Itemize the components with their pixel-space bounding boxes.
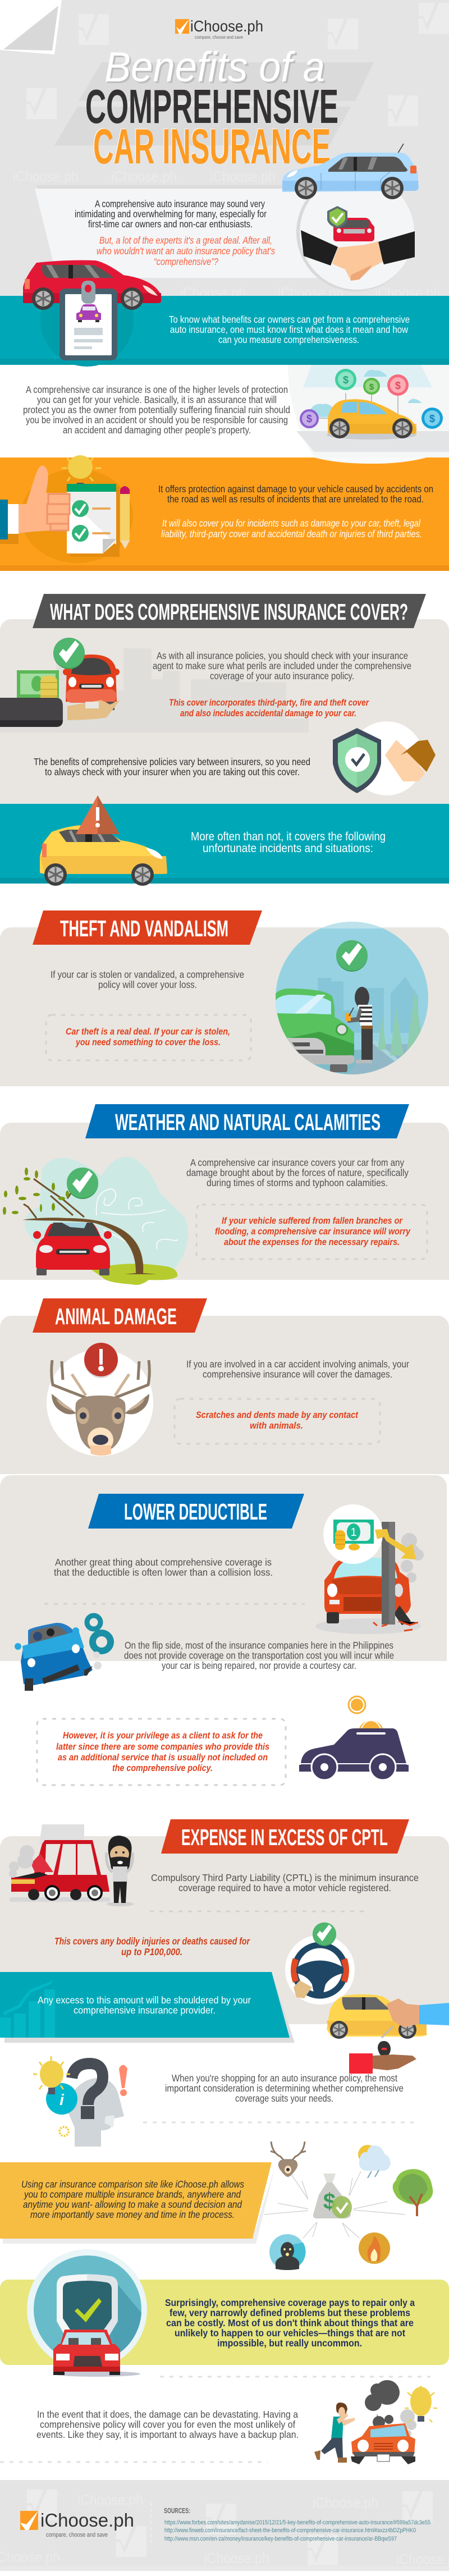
comparison text: anytime you want- allowing to make a sound decision and: [23, 2199, 242, 2210]
panel: header: iChoose.ph: [111, 168, 177, 185]
intro text: [75, 198, 267, 230]
text: coverage required to have a motor vehicle registered.: [178, 1882, 391, 1893]
panel: what does comprehensive insurance cover: [0, 594, 449, 804]
icon: tree falling on red car: [3, 1157, 188, 1285]
text: benefits vary: to always check with your insurer when you are taking out this cover.: [45, 766, 300, 777]
callout: courtesy car privilege: latter since there are some companies who provide this: [56, 1741, 269, 1752]
icon: steering wheel: [285, 1923, 355, 2005]
text: check with agent: [153, 650, 411, 681]
intro text: first-time car owners and non-car enthusiasts.: [88, 218, 253, 230]
panel: comparison site callout: [0, 2162, 275, 2244]
sources: http://www.msn.com/en-za/money/insurance/key-benefits-of-comprehensive-car-insurance/ar-BBqwS97: [164, 2536, 397, 2542]
callout: with animals.: [250, 1420, 303, 1431]
intro text: intimidating and overwhelming for many, especially for: [75, 208, 267, 219]
callout: [46, 1015, 251, 1060]
comparison text: Using car insurance comparison site like iChoose.ph allows: [21, 2179, 244, 2190]
text: shopping for a policy: [165, 2072, 404, 2104]
icon: money bag with risks: [264, 2142, 433, 2270]
callout: about the expenses for the necessary repairs.: [224, 1237, 400, 1247]
panel: header: iChoose.ph: [375, 284, 441, 301]
text: comprehensive insurance will cover the damages.: [203, 1369, 392, 1380]
red callout: up to P100,000.: [121, 1946, 182, 1957]
title: [85, 43, 338, 174]
teal intro text: auto insurance, one must know first what does it mean and how: [170, 324, 408, 335]
text: benefits vary: The benefits of comprehensive policies vary between insurers, so you need: [34, 756, 310, 767]
icon: car key handover: [327, 1994, 449, 2074]
text: [51, 969, 244, 990]
orange band italic text: [161, 518, 422, 539]
icon: money car circle: $: [306, 413, 312, 424]
callout: [196, 1205, 427, 1259]
icon: car crashed into pole: 1: [350, 1526, 357, 1539]
text: [151, 1872, 419, 1893]
panel: footer: iChoose.ph: [204, 2550, 269, 2566]
text: devastating damage: [36, 2409, 299, 2440]
text: Compulsory Third Party Liability (CPTL) is the minimum insurance: [151, 1872, 419, 1883]
callout: courtesy car privilege: the comprehensive policy.: [112, 1763, 213, 1773]
text: can be costly. Most of us don't think about things that are: [166, 2317, 414, 2328]
panel: header: iChoose.ph: [180, 284, 246, 301]
teal excess text: comprehensive insurance provider.: [74, 2005, 216, 2016]
icon: coin car: [299, 1696, 409, 1780]
panel: footer: [0, 2480, 449, 2571]
text: [165, 2297, 415, 2349]
panel: footer: iChoose.ph: [77, 2491, 143, 2508]
comparison text: more importantly save money and time in the process.: [30, 2209, 235, 2220]
callout: Scratches and dents made by any contact: [196, 1410, 359, 1420]
panel: theft and vandalism: [0, 910, 449, 1086]
heading banner: [33, 910, 262, 945]
red callout: [54, 1936, 250, 1957]
text: Another great thing about comprehensive coverage is: [55, 1557, 272, 1568]
callout: flooding, a comprehensive car insurance will worry: [215, 1226, 411, 1237]
icon: car crashed into pole: [315, 1504, 424, 1634]
panel: teal covers band: [0, 795, 449, 886]
heading banner: [161, 1819, 409, 1854]
text: check with agent: agent to make sure what perils are included under the comprehensive: [153, 660, 411, 671]
teal intro text: To know what benefits car owners can get from a comprehensive: [169, 314, 410, 325]
red callout: This covers any bodily injuries or deaths caused for: [54, 1936, 250, 1947]
icon: page curl: [0, 0, 62, 54]
text: policy will cover your loss.: [98, 979, 197, 990]
title: Benefits of a: [104, 43, 325, 90]
definition text: A comprehensive car insurance is one of the higher levels of protection: [26, 384, 288, 395]
comparison text: you to compare multiple insurance brands, anywhere and: [24, 2189, 241, 2200]
icon: car in hand with money: [0, 638, 120, 727]
panel: surprisingly: [0, 2249, 449, 2377]
teal intro text: can you measure comprehensiveness.: [218, 334, 359, 345]
callout: [175, 1399, 380, 1444]
intro red callout: who wouldn't want an auto insurance policy that's: [97, 245, 275, 257]
callout: courtesy car privilege: [37, 1719, 286, 1785]
text: shopping for a policy: When you're shopping for an auto insurance policy, the most: [172, 2072, 397, 2084]
panel: header: [0, 0, 449, 301]
panel: orange band: [0, 365, 449, 571]
intro red callout: But, a lot of the experts it's a great deal. After all,: [99, 235, 272, 246]
red callout: [169, 697, 369, 719]
sources: SOURCES:: [164, 2506, 190, 2515]
text: [186, 1358, 409, 1380]
panel: expense in excess of CPTL: [0, 1819, 449, 2024]
title backing shapes: [54, 62, 374, 145]
text: damage brought about by the forces of nature, specifically: [186, 1167, 409, 1178]
text: [54, 1557, 273, 1578]
heading banner: THEFT AND VANDALISM: [60, 916, 228, 941]
text: [186, 1157, 409, 1188]
icon: yellow car with warning triangle: [40, 795, 167, 886]
text: that the deductible is often lower than a collision loss.: [54, 1567, 273, 1578]
sources: [164, 2506, 430, 2542]
panel: teal intro band: [0, 260, 449, 367]
definition text: an accident and damaging other people's property.: [63, 424, 251, 436]
logo: [175, 17, 263, 40]
text: impossible, but really uncommon.: [217, 2337, 362, 2349]
text: On the flip side, most of the insurance companies here in the Philippines: [125, 1640, 393, 1651]
icon: clipboard: [59, 281, 117, 360]
icon: thief at green car: [276, 922, 429, 1075]
icon: check badge: [336, 940, 368, 972]
comparison text: [21, 2179, 244, 2220]
icon: money car circle: $: [395, 380, 401, 391]
text: benefits vary: [34, 756, 310, 777]
panel: lower deductible: [0, 1475, 447, 1691]
panel: intro text card: [35, 185, 359, 278]
red callout: and also includes accidental damage to your car.: [180, 708, 356, 719]
callout: courtesy car privilege: as an additional service that is usually not included on: [58, 1752, 268, 1763]
text: shopping for a policy: coverage suits your needs.: [235, 2093, 333, 2104]
panel: animal damage: [0, 1298, 449, 1474]
teal covers text: [191, 830, 386, 855]
definition text: [23, 384, 290, 436]
text: check with agent: coverage of your auto insurance policy.: [210, 670, 354, 681]
heading banner: [88, 1494, 304, 1529]
panel: weather and natural calamities: [0, 1104, 449, 1285]
text: your car is being repaired, nor provide a courtesy car.: [162, 1660, 356, 1671]
panel: footer: iChoose.ph: [313, 2494, 378, 2511]
heading banner: [33, 1298, 207, 1333]
definition text: you can get for your vehicle. Basically, it is an assurance that will: [37, 394, 277, 405]
teal covers text: More often than not, it covers the following: [191, 830, 386, 843]
heading banner: LOWER DEDUCTIBLE: [124, 1499, 267, 1525]
callout: Car theft is a real deal. If your car is stolen,: [66, 1026, 230, 1037]
teal covers text: unfortunate incidents and situations:: [203, 842, 373, 855]
panel: header: iChoose.ph: [13, 168, 79, 185]
teal intro text: [169, 314, 410, 345]
icon: man and burning car with bulb: [314, 2380, 437, 2464]
icon: thumbs up checklist: [0, 455, 133, 563]
text: devastating damage: events. Like they say, it is important to always have a backup plan.: [36, 2429, 299, 2440]
icon: money bag with risks: $: [323, 2189, 336, 2214]
heading banner: [85, 1104, 409, 1138]
icon: stranded blue car with gears: [15, 1616, 111, 1691]
intro text: A comprehensive auto insurance may sound very: [95, 198, 265, 209]
icon: question head with bulb: i: [59, 2091, 65, 2108]
text: few, very narrowly defined problems but these problems: [169, 2307, 410, 2318]
footer logo: compare, choose and save: [46, 2532, 108, 2538]
icon: shield and red car: [27, 2249, 147, 2377]
icon: handshake over car circle: [296, 173, 415, 291]
text: during times of storms and typhoon calamities.: [207, 1177, 388, 1188]
icon: money car circle: $: [429, 413, 435, 424]
panel: header: iChoose.ph: [210, 168, 276, 185]
teal excess text: Any excess to this amount will be shouldered by your: [38, 1994, 251, 2006]
icon: money car circle: [288, 365, 449, 464]
heading banner: [33, 594, 426, 628]
intro red callout: “comprehensive”?: [154, 256, 218, 267]
icon: deer with alert: [47, 1343, 153, 1456]
heading banner: ANIMAL DAMAGE: [55, 1303, 177, 1329]
definition text: you be involved in an accident or should you be responsible for causing: [26, 414, 288, 425]
text: devastating damage: In the event that it does, the damage can be devastating. Having a: [37, 2409, 298, 2420]
definition text: protect you as the owner from potentially suffering financial ruin should: [23, 404, 290, 415]
text: If you are involved in a car accident involving animals, your: [186, 1358, 409, 1370]
icon: shield and handshake: [333, 721, 436, 795]
icon: question head with bulb: [33, 2056, 127, 2147]
text: If your car is stolen or vandalized, a comprehensive: [51, 969, 244, 980]
callout: courtesy car privilege: However, it is your privilege as a client to ask for the: [63, 1730, 263, 1741]
text: devastating damage: comprehensive policy will cover you for even the most unlikely of: [40, 2419, 295, 2430]
text: unlikely to happen to our vehicles—things that are not: [175, 2327, 405, 2339]
intro red callout: [97, 235, 275, 267]
chart: rising bars decoration: [0, 1980, 55, 2038]
callout: you need something to cover the loss.: [75, 1037, 221, 1047]
text: check with agent: As with all insurance policies, you should check with your insurance: [157, 650, 408, 661]
text: shopping for a policy: important consideration is determining whether comprehensive: [165, 2083, 404, 2094]
logo: iChoose.ph: [190, 17, 263, 35]
icon: money car circle: $: [343, 374, 349, 386]
orange band text: [158, 483, 433, 505]
icon: broken down red car and man: [9, 1824, 134, 1906]
icon: blue car: [282, 144, 419, 199]
teal excess text: [38, 1994, 251, 2016]
panel: teal excess callout: [0, 1972, 295, 2043]
text: [124, 1640, 394, 1671]
panel: header: iChoose.ph: [278, 284, 343, 301]
icon: money car circle: $: [369, 382, 374, 392]
icon: red car: [23, 260, 161, 310]
footer logo: iChoose.ph: [40, 2510, 134, 2531]
logo: compare, choose and save: [195, 35, 243, 40]
text: Surprisingly, comprehensive coverage pays to repair only a: [165, 2297, 415, 2308]
text: does not provide coverage on the transportation cost you will incur while: [124, 1650, 394, 1661]
text: A comprehensive car insurance covers your car from any: [190, 1157, 404, 1168]
callout: If your vehicle suffered from fallen branches or: [222, 1215, 403, 1226]
footer logo: [20, 2510, 134, 2538]
red callout: This cover incorporates third-party, fire and theft cover: [169, 697, 369, 708]
